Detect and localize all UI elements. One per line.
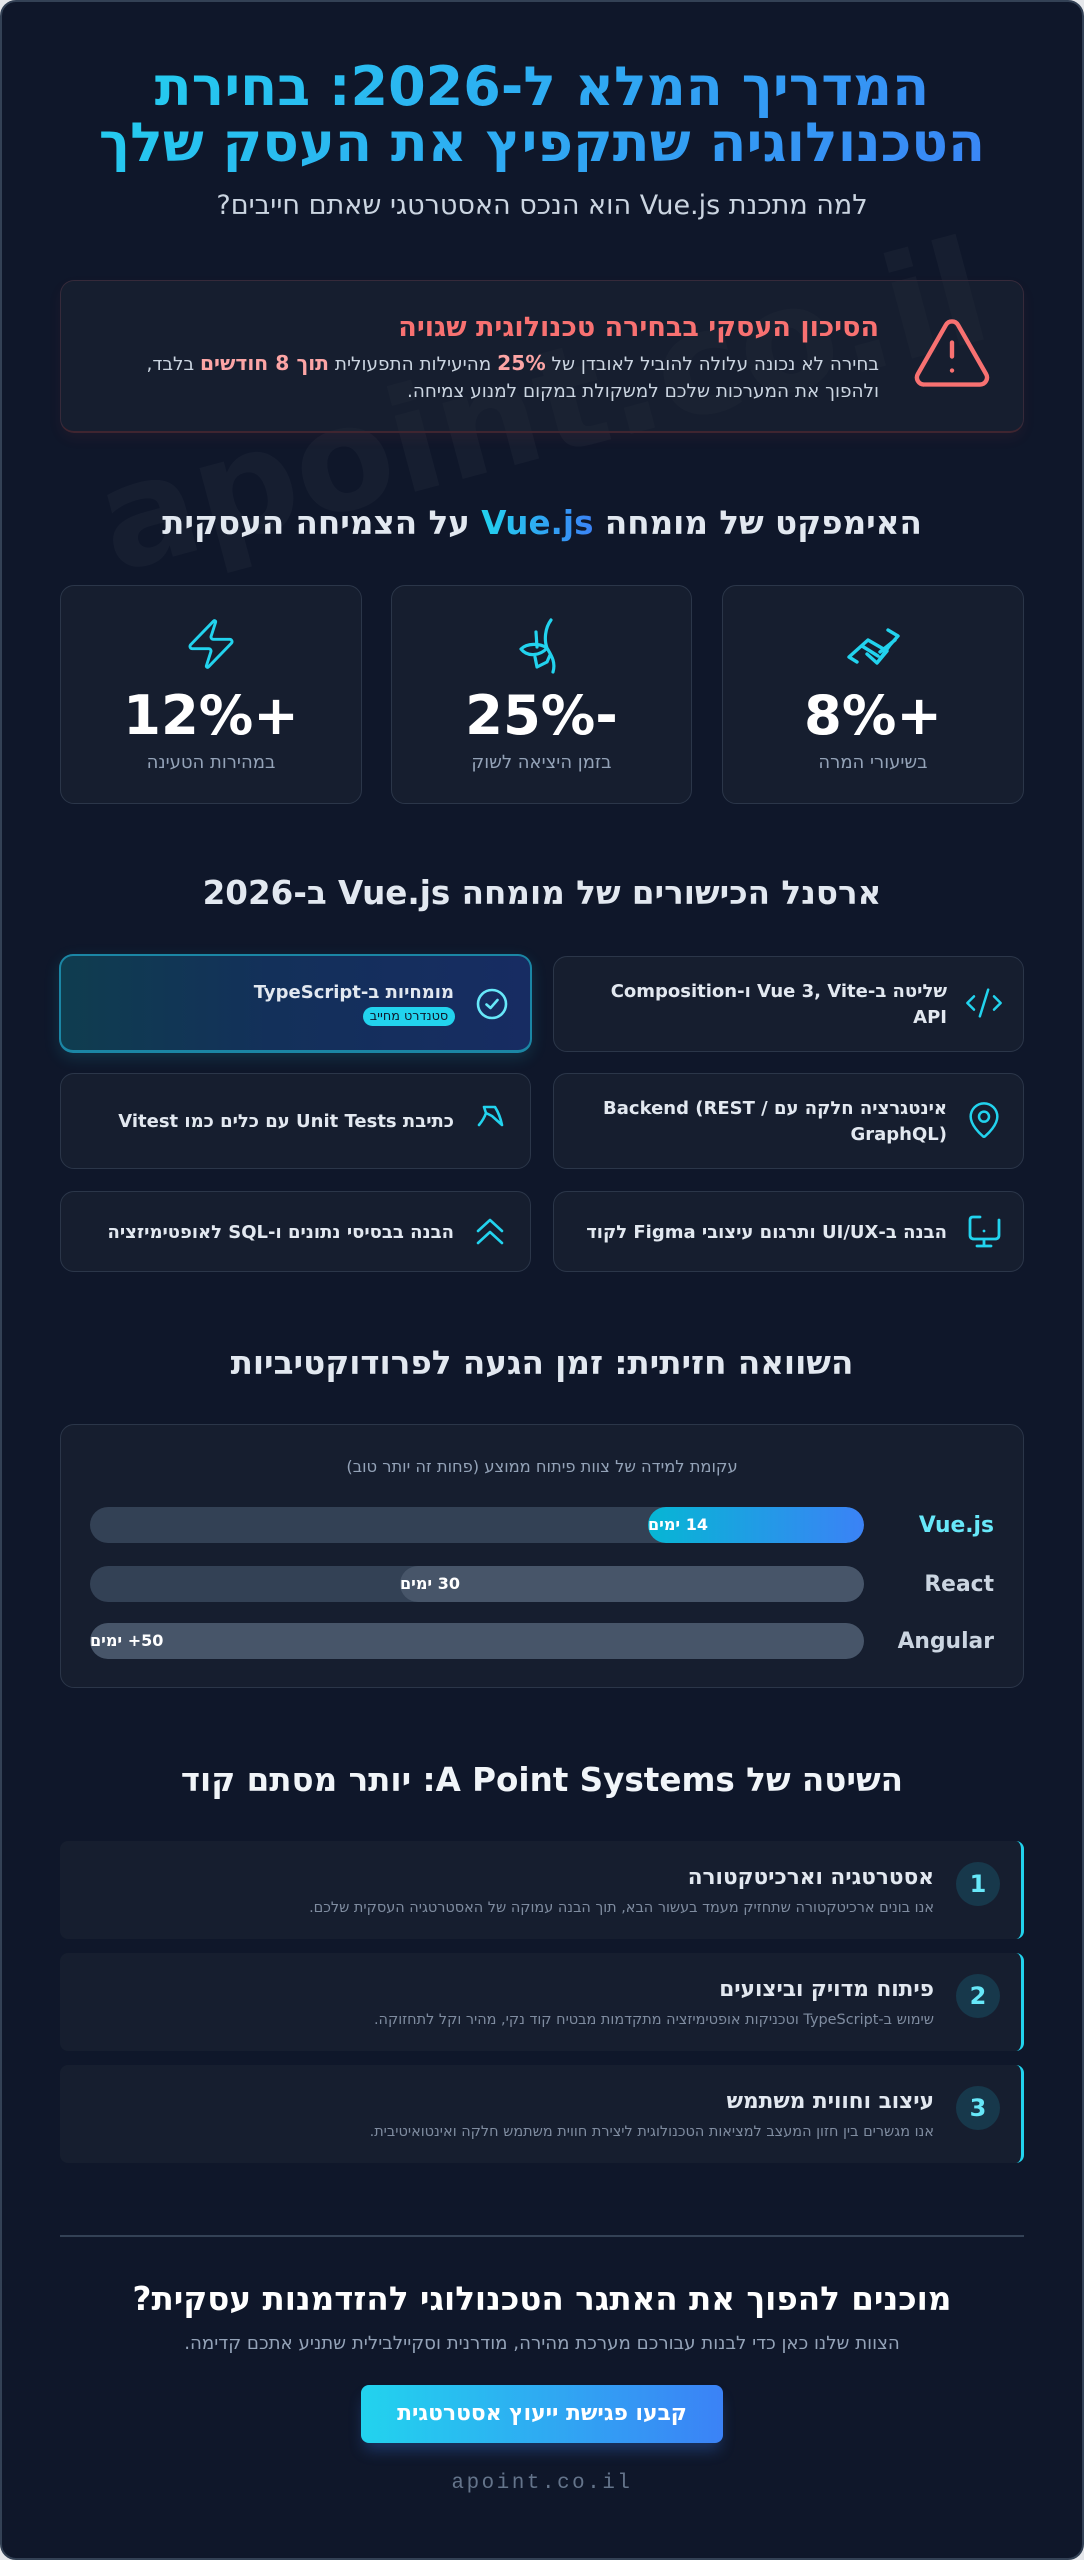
risk body text xyxy=(146,351,879,402)
step title: אסטרטגיה וארכיטקטורה xyxy=(688,1865,934,1890)
track xyxy=(90,1623,864,1659)
track: 30 ימים xyxy=(400,1574,460,1593)
panel: bar chart xyxy=(60,1424,1024,1688)
bar: react xyxy=(90,1566,994,1602)
risk body text: בחירה לא נכונה עלולה להוביל לאובדן של 25% מהיעילות התפעולית תוך 8 חודשים בלבד, xyxy=(146,351,879,375)
number xyxy=(956,1974,1000,2018)
title xyxy=(60,59,1024,172)
stat label: בזמן היציאה לשוק xyxy=(471,752,612,773)
heading: impact: האימפקט של מומחה Vue.js על הצמיחה העסקית xyxy=(162,504,922,542)
panel: step 3 xyxy=(60,2065,1024,2163)
panel: stat conversion xyxy=(722,585,1024,804)
track xyxy=(90,1566,864,1602)
panel: skill vue xyxy=(553,956,1024,1052)
skill text: שליטה ב-Vue 3, Vite ו-Composition API xyxy=(611,981,947,1028)
panel: skill sql xyxy=(60,1191,531,1272)
watermark: apoint.co.il xyxy=(80,207,1004,605)
number xyxy=(956,2086,1000,2130)
step description: אנו מגשרים בין חזון המעצב למציאות הטכנולוגית ליצירת חווית משתמש חלקה ואינטואיטיבית. xyxy=(370,2124,934,2140)
stat label: במהירות הטעינה xyxy=(147,752,275,773)
icon: flask xyxy=(478,1106,504,1126)
badge xyxy=(363,1007,455,1026)
number: 1 xyxy=(970,1870,986,1898)
number: 2 xyxy=(970,1982,986,2010)
heading: skills: ארסנל הכישורים של מומחה Vue.js ב-2026 xyxy=(203,874,881,912)
skill text: הבנה ב-UI/UX ותרגום עיצובי Figma לקוד xyxy=(586,1222,947,1243)
label: Vue.js xyxy=(919,1513,994,1538)
step title: עיצוב וחווית משתמש xyxy=(727,2089,934,2114)
skill text: אינטגרציה חלקה עם Backend (REST / GraphQL) xyxy=(603,1098,947,1144)
bar: angular xyxy=(90,1623,994,1659)
label: React xyxy=(924,1572,994,1597)
bar: vue xyxy=(90,1507,994,1543)
panel: step 1 xyxy=(60,1841,1024,1939)
panel: skill unit tests xyxy=(60,1073,531,1169)
footer url: apoint.co.il xyxy=(452,2472,632,2495)
track: 50+ ימים xyxy=(90,1631,163,1650)
icon: code xyxy=(966,988,1002,1018)
risk body text: ולהפוך את המערכות שלכם למשקולת במקום למנוע צמיחה. xyxy=(407,381,879,402)
icon: chevrons up xyxy=(476,1218,504,1244)
heading: method: השיטה של A Point Systems: יותר מסתם קוד xyxy=(181,1761,903,1799)
icon: warning triangle xyxy=(914,319,990,387)
stat label: בשיעורי המרה xyxy=(818,752,928,773)
cta heading: מוכנים להפוך את האתגר הטכנולוגי להזדמנות עסקית? xyxy=(133,2280,951,2318)
risk heading: הסיכון העסקי בבחירה טכנולוגית שגויה xyxy=(398,312,879,343)
chart caption: עקומת למידה של צוות פיתוח ממוצע (פחות זה יותר טוב) xyxy=(346,1457,738,1476)
icon: check circle xyxy=(476,988,508,1020)
badge: סטנדרט מחייב xyxy=(370,1009,448,1024)
track: 14 ימים xyxy=(648,1515,708,1534)
number xyxy=(956,1862,1000,1906)
step description: שימוש ב-TypeScript וטכניקות אופטימיזציה מתקדמות מבטיח קוד נקי, מהיר וקל לתחזוקה. xyxy=(374,2012,934,2028)
icon: chart xyxy=(847,628,900,665)
skill text: הבנה בבסיסי נתונים ו-SQL לאופטימיזציה xyxy=(108,1222,454,1243)
icon: monitor xyxy=(968,1216,1000,1248)
cta text: הצוות שלנו כאן כדי לבנות עבורכם מערכת מהירה, מודרנית וסקיילבילית שתניע אתכם קדימה. xyxy=(184,2333,900,2354)
cta button: קבעו פגישת ייעוץ אסטרטגית xyxy=(397,2401,687,2426)
number: 3 xyxy=(970,2094,986,2122)
stat value: +8% xyxy=(804,684,942,747)
step description: אנו בונים ארכיטקטורה שתחזיק מעמד בעשור הבא, תוך הבנה עמוקה של האסטרטגיה העסקית שלכם. xyxy=(309,1900,934,1916)
skill text: מומחיות ב-TypeScript xyxy=(254,982,454,1003)
stat value: -25% xyxy=(465,684,618,747)
panel: stat speed xyxy=(60,585,362,804)
heading: comparison: השוואה חזיתית: זמן הגעה לפרודוקטיביות xyxy=(231,1344,853,1382)
panel: skill backend xyxy=(553,1073,1024,1169)
panel: stat time to market xyxy=(391,585,692,804)
step title: פיתוח מדויק וביצועים xyxy=(719,1977,934,2002)
skill text: כתיבת Unit Tests עם כלים כמו Vitest xyxy=(118,1111,454,1132)
stat value: +12% xyxy=(123,684,299,747)
panel: step 2 xyxy=(60,1953,1024,2051)
panel: risk alert xyxy=(60,280,1024,433)
cta button xyxy=(361,2385,723,2443)
icon: map pin xyxy=(969,1102,999,1138)
icon: leaf xyxy=(519,618,556,674)
track xyxy=(90,1507,864,1543)
panel: skill typescript xyxy=(59,954,532,1053)
title: הטכנולוגיה שתקפיץ את העסק שלך xyxy=(99,111,985,174)
subtitle: למה מתכנת Vue.js הוא הנכס האסטרטגי שאתם חייבים? xyxy=(216,190,868,221)
label: Angular xyxy=(898,1629,994,1654)
icon: lightning xyxy=(188,619,234,669)
panel: skill ui xyxy=(553,1191,1024,1272)
title: המדריך המלא ל-2026: בחירת xyxy=(155,55,929,118)
